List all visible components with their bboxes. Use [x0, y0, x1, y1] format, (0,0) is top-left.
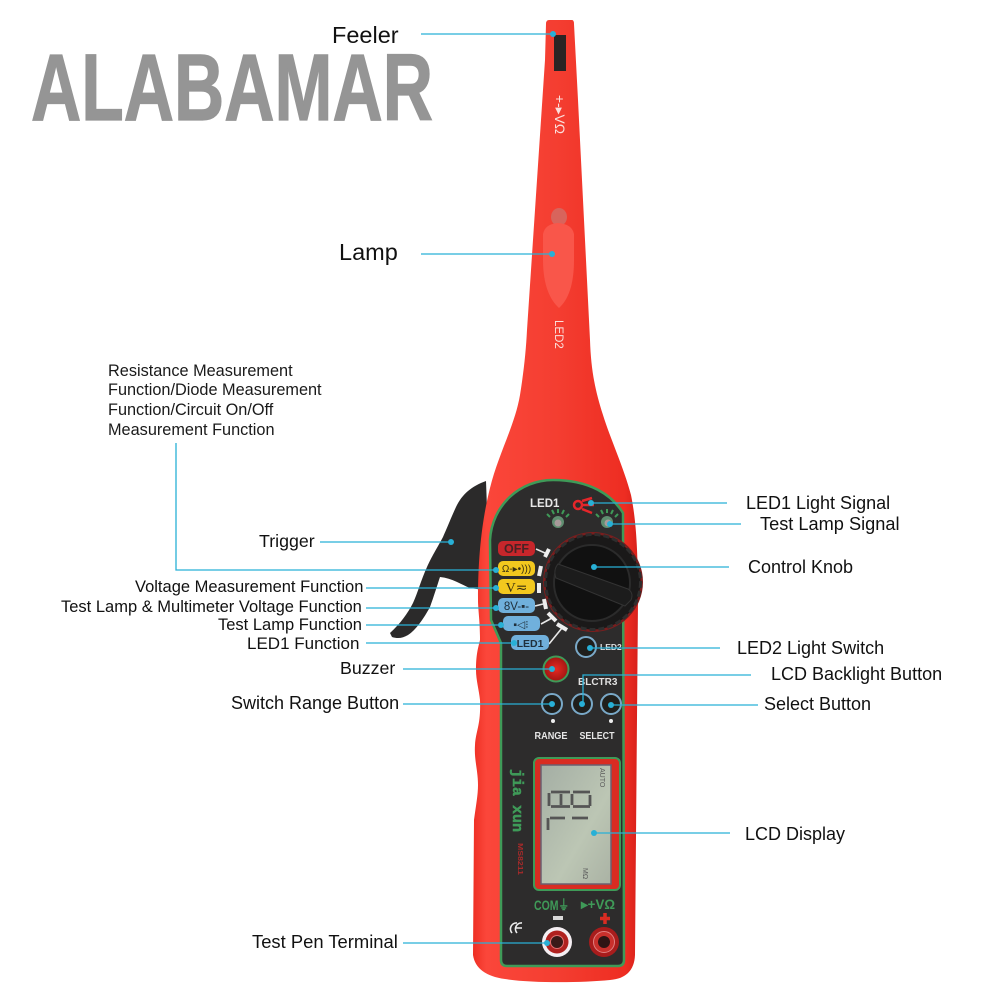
range button	[542, 694, 562, 723]
feeler slot	[554, 35, 566, 71]
plus sign	[600, 913, 610, 924]
label: Test Pen Terminal: Test Pen Terminal	[252, 931, 398, 952]
select button	[601, 694, 621, 723]
model number: MS8211	[516, 843, 525, 875]
function pill: test lamp multimeter: 8V-▪-	[504, 601, 529, 613]
BLCTR3 label: BLCTR3	[578, 677, 618, 688]
label: Test Lamp Function: Test Lamp Function	[218, 616, 362, 634]
function pill: LED1: LED1	[517, 638, 544, 650]
label: resistance measurement text block: Resistance Measurement	[108, 362, 293, 380]
function pill: test lamp multimeter	[498, 598, 535, 613]
LED1 panel label: LED1	[530, 498, 560, 510]
positive terminal	[589, 927, 619, 957]
trigger	[390, 481, 490, 638]
SELECT label: SELECT	[580, 730, 615, 742]
function pill: voltage: V≂	[506, 581, 527, 596]
function pill: LED1	[511, 635, 549, 650]
function pill: test lamp: ▪◁⁝	[513, 619, 529, 631]
green LED indicator	[547, 509, 569, 528]
watermark: ALABAMAR: ALABAMAR	[31, 35, 433, 141]
label: Trigger: Trigger	[259, 531, 315, 551]
CE mark	[510, 923, 522, 933]
function pill: resistance	[498, 561, 535, 576]
callout dots	[448, 31, 614, 946]
backlight button	[572, 694, 592, 714]
function pill: resistance: Ω-▸•)))	[502, 564, 531, 575]
minus sign	[553, 916, 563, 920]
label: Control Knob: Control Knob	[748, 557, 853, 577]
polarity mark: +-▸VΩ	[552, 95, 567, 134]
label: LCD Display: LCD Display	[745, 824, 845, 844]
LED2 switch	[576, 637, 622, 657]
LCD display: AUTO	[598, 768, 605, 788]
lamp cover	[543, 223, 574, 308]
label: Switch Range Button: Switch Range Button	[231, 693, 399, 713]
LCD display	[534, 758, 620, 890]
callout lines	[176, 34, 758, 943]
brand name: jia xun	[508, 769, 525, 832]
label: Voltage Measurement Function: Voltage Measurement Function	[135, 578, 363, 596]
buzzer	[544, 656, 568, 682]
label: Lamp: Lamp	[339, 239, 398, 265]
label: LCD Backlight Button: LCD Backlight Button	[771, 664, 942, 684]
label: LED1 Function: LED1 Function	[247, 634, 359, 653]
label: LED2 Light Switch: LED2 Light Switch	[737, 638, 884, 658]
LED2 switch: LED2	[600, 642, 622, 652]
control panel	[490, 480, 624, 966]
label: resistance measurement text block: Function/Circuit On/Off	[108, 401, 274, 419]
test lamp LED indicator	[596, 509, 618, 528]
LCD display: MΩ	[581, 868, 588, 879]
LED1 signal icon	[574, 498, 594, 513]
label: Select Button: Select Button	[764, 694, 871, 714]
function pill: test lamp	[503, 616, 540, 631]
label: resistance measurement text block: Function/Diode Measurement	[108, 381, 322, 399]
RANGE label: RANGE	[534, 730, 568, 742]
negative terminal	[542, 927, 572, 957]
V ohm terminal label: ▸+VΩ	[580, 896, 615, 912]
device body	[473, 20, 643, 982]
label: Test Lamp and Multimeter: Test Lamp & Multimeter Voltage Function	[61, 598, 362, 616]
control knob	[543, 532, 643, 632]
label: resistance measurement text block	[108, 362, 322, 439]
function pill: OFF: OFF	[504, 542, 529, 556]
label: Test Lamp Signal: Test Lamp Signal	[760, 514, 900, 534]
label: LED1 Light Signal: LED1 Light Signal	[746, 493, 890, 513]
label: Buzzer: Buzzer	[340, 658, 395, 678]
label: resistance measurement text block: Measurement Function	[108, 421, 275, 439]
function pill: OFF	[498, 541, 535, 556]
selector ticks	[535, 549, 562, 644]
COM terminal label: COM⏚	[534, 897, 569, 913]
lamp lens	[551, 208, 567, 226]
label: Feeler: Feeler	[332, 22, 399, 48]
function pill: voltage	[498, 579, 535, 596]
LED2 body label: LED2	[552, 320, 564, 349]
